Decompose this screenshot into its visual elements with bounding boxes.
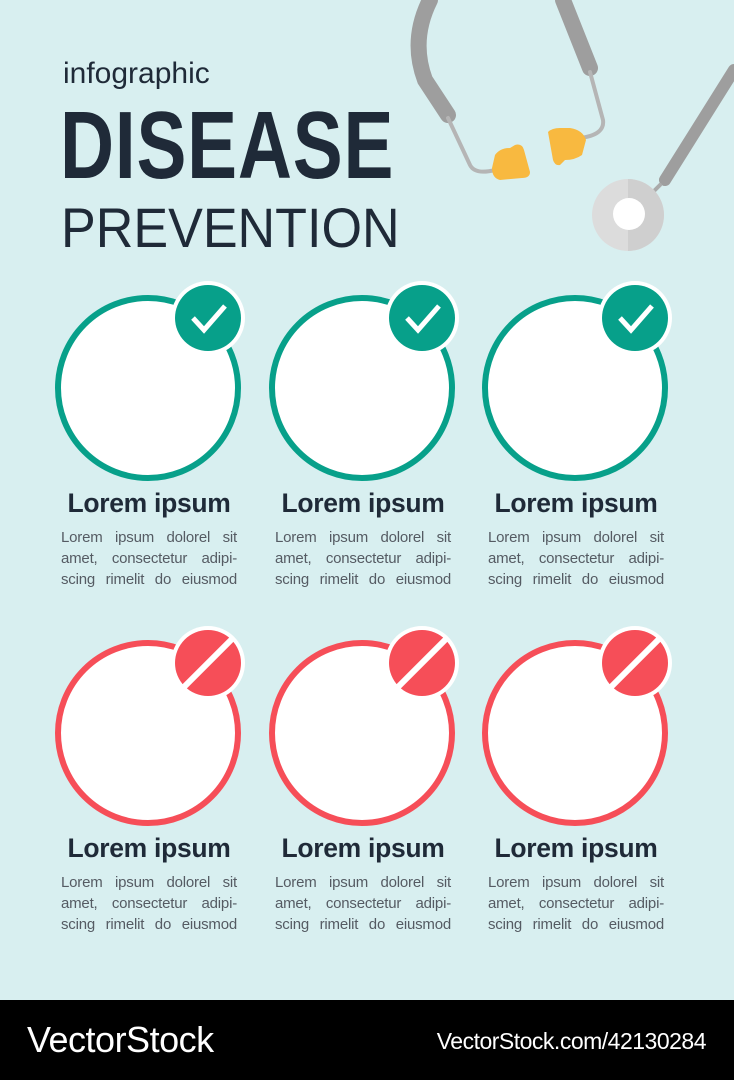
circle 3: [485, 281, 672, 478]
text block 6: [488, 833, 664, 933]
chest piece: [592, 179, 664, 251]
text: scing rimelit do eiusmod: [488, 571, 664, 588]
text: scing rimelit do eiusmod: [61, 916, 237, 933]
circle 5: [272, 626, 459, 823]
footer bar: [0, 1000, 734, 1080]
circle 1: [58, 281, 245, 478]
text: scing rimelit do eiusmod: [275, 571, 451, 588]
row 1 circles (green): [55, 281, 672, 481]
text block 2: [275, 488, 452, 588]
circle 6: [485, 626, 672, 823]
heading: PREVENTION: PREVENTION: [61, 196, 400, 259]
text: Lorem ipsum dolorel sit amet, consectetur adipi-: [61, 874, 237, 912]
text: Lorem ipsum dolorel sit amet, consectetur adipi-: [488, 874, 664, 912]
icon: stethoscope: [410, 0, 734, 251]
text: Lorem ipsum dolorel sit amet, consectetur adipi-: [61, 529, 237, 567]
heading: DISEASE: DISEASE: [60, 92, 394, 199]
circle 4: [58, 626, 245, 823]
circle 2: [272, 281, 459, 478]
row 2 circles (red): [55, 626, 672, 826]
text: Lorem ipsum: [281, 833, 445, 863]
footer url: VectorStock.com/42130284: [437, 1028, 706, 1054]
text block 5: [275, 833, 452, 933]
text: Lorem ipsum: [67, 833, 231, 863]
text block 4: [61, 833, 238, 933]
text: Lorem ipsum: [494, 488, 658, 518]
text: Lorem ipsum dolorel sit amet, consectetur adipi-: [275, 529, 451, 567]
subtitle: infographic: infographic: [63, 57, 210, 90]
earpieces: [492, 145, 530, 180]
text block 1: [61, 488, 238, 588]
footer logo: VectorStock: [27, 1019, 214, 1060]
text: Lorem ipsum dolorel sit amet, consectetur adipi-: [488, 529, 664, 567]
text: Lorem ipsum dolorel sit amet, consectetur adipi-: [275, 874, 451, 912]
text: Lorem ipsum: [494, 833, 658, 863]
text: Lorem ipsum: [67, 488, 231, 518]
text: Lorem ipsum: [281, 488, 445, 518]
text: scing rimelit do eiusmod: [61, 571, 237, 588]
text: scing rimelit do eiusmod: [275, 916, 451, 933]
text: scing rimelit do eiusmod: [488, 916, 664, 933]
text block 3: [488, 488, 664, 588]
title: [60, 57, 400, 259]
